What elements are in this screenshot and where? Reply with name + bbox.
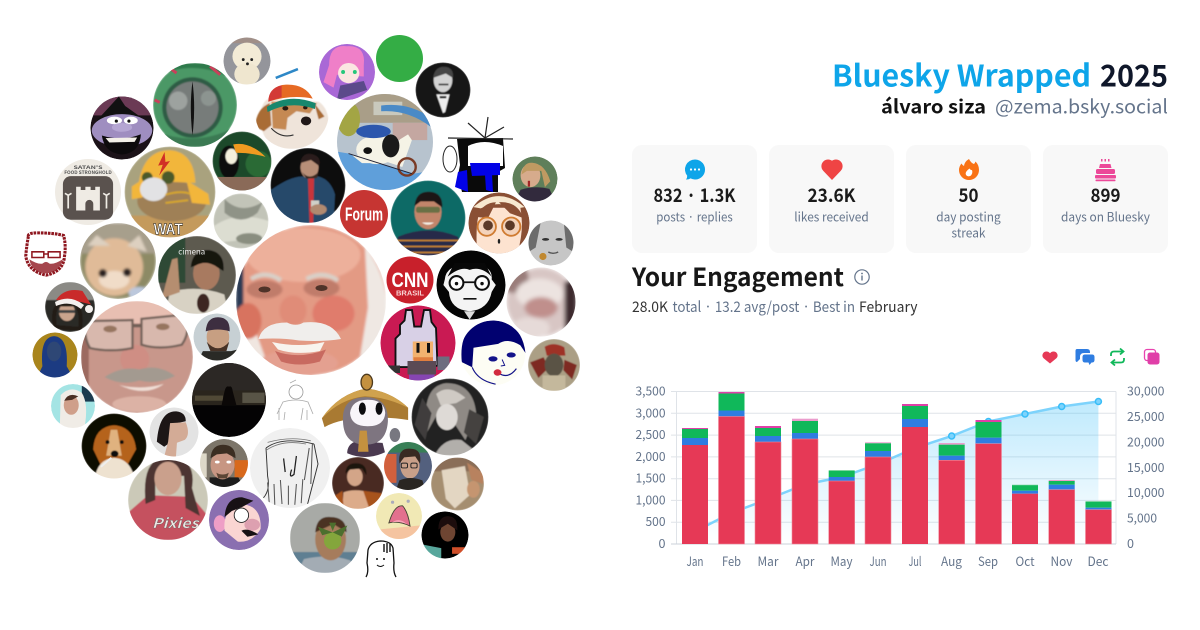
- left axis labels: 2,000: [636, 446, 666, 465]
- avatar: son of man apple: [290, 503, 360, 573]
- title: Bluesky Wrapped: [832, 52, 1091, 96]
- stat card: days on Bluesky: days on Bluesky: [1061, 206, 1150, 226]
- avatar: big pen sketch: [250, 428, 330, 508]
- month labels: Dec: [1088, 551, 1109, 570]
- month labels: Nov: [1050, 551, 1073, 570]
- avatar: ghost in golden hat: [321, 369, 409, 457]
- avatar: kitten: [80, 223, 156, 299]
- left axis labels: 1,500: [636, 468, 666, 487]
- avatar: frog WAT: [124, 146, 216, 238]
- avatar: woman in black and white: [412, 378, 488, 456]
- engagement summary: [632, 296, 918, 317]
- bar: Sep: [976, 420, 1002, 544]
- avatar cluster: [26, 35, 580, 577]
- bar: Aug: [939, 443, 965, 544]
- avatar: beanie man: [194, 314, 240, 360]
- left axis labels: 3,500: [636, 380, 666, 400]
- main avatar: smiling old man: [234, 225, 386, 376]
- avatar: girl with nosebleed: [512, 156, 558, 202]
- left axis labels: 1,000: [636, 489, 666, 508]
- month labels: Aug: [941, 551, 962, 570]
- bar: Dec: [1086, 501, 1112, 544]
- avatar: blue hooded figure: [32, 332, 78, 378]
- avatar: Forum logo: [340, 190, 388, 238]
- chart legend: [1042, 348, 1160, 366]
- stat card: posts and replies: posts · replies: [656, 206, 733, 226]
- avatar: night silhouette: [192, 363, 266, 437]
- month labels: May: [830, 551, 853, 570]
- avatar: CNN Brasil: [386, 256, 434, 304]
- icon: heart: [822, 160, 842, 178]
- avatar: Satan's food stronghold: FOOD STRONGHOLD: [64, 170, 112, 176]
- avatar: victorian man: [416, 62, 470, 118]
- avatar: black glasses cartoon: [436, 250, 506, 320]
- left axis labels: 2,500: [636, 424, 666, 443]
- stat card: day posting streak: streak: [952, 222, 986, 242]
- avatar: red bearded doodle: [26, 233, 65, 275]
- bar: Jun: [865, 442, 891, 544]
- stat card: days on Bluesky: 899: [1090, 182, 1120, 208]
- avatar: big glasses man: [81, 301, 193, 413]
- profile name and handle: [881, 92, 1168, 120]
- avatar: pale screaming creature: [376, 493, 422, 539]
- engagement summary: total · 13.2 avg/post · Best in: [672, 296, 855, 317]
- avatar: cimena man: [158, 236, 236, 314]
- avatar: blue mask doodle: [443, 117, 513, 192]
- month labels: Jun: [870, 551, 886, 570]
- left axis labels: 3,000: [636, 402, 666, 421]
- avatar: goth woman profile: [150, 408, 198, 456]
- heading: Your Engagement: Your Engagement: [631, 258, 844, 294]
- avatar: toucan: [212, 132, 272, 190]
- avatar: santa hat woman: [45, 282, 95, 332]
- avatar: Satan's food stronghold: SATAN'S: [73, 165, 103, 171]
- avatar: blurry animal: [506, 268, 576, 336]
- stat card: day posting streak: [906, 145, 1031, 253]
- avatar: dark young man: [422, 512, 468, 558]
- month labels: Sep: [978, 551, 998, 570]
- right axis labels: 15,000: [1127, 457, 1165, 476]
- profile name and handle: álvaro siza: [881, 92, 986, 120]
- stat card: day posting streak: 50: [958, 182, 979, 208]
- avatar: teal man: [390, 180, 466, 256]
- cumulative area and line: [695, 398, 1101, 544]
- avatar: pixies shirt woman: Pixies: [152, 512, 200, 532]
- stat card: likes received: [769, 145, 894, 253]
- stat card: day posting streak: day posting: [936, 206, 1001, 226]
- avatar: dog with propeller hat: [255, 69, 329, 149]
- avatar: pixies shirt woman: [128, 457, 208, 540]
- avatar: Forum logo: Forum: [345, 204, 383, 224]
- avatar: purple villain: [90, 96, 154, 160]
- avatar: plain green: [376, 35, 423, 82]
- avatar: pink anime: [319, 44, 375, 100]
- avatar: frog WAT: WAT: [154, 221, 183, 238]
- icon: legend quotes: [1144, 350, 1160, 364]
- avatar: man in jacket: [269, 148, 346, 223]
- bar: Nov: [1049, 480, 1075, 544]
- avatar: hoodie person: [51, 384, 95, 428]
- avatar: red painting: [528, 339, 580, 391]
- stacked bars: [682, 392, 1112, 544]
- right axis labels: 20,000: [1127, 431, 1165, 450]
- stat card: posts and replies: [632, 145, 757, 253]
- right axis labels: 5,000: [1127, 508, 1157, 527]
- avatar: line drawn head: [366, 541, 396, 577]
- bar: Oct: [1012, 485, 1038, 544]
- icon: info: [855, 270, 869, 284]
- icon: chat bubble: [685, 159, 705, 180]
- icon: cake: [1095, 159, 1116, 181]
- icon: flame: [959, 159, 979, 180]
- avatar: Satan's food stronghold: [55, 159, 121, 225]
- month labels: [686, 551, 1109, 570]
- avatar: anime girl with glasses: [468, 192, 530, 254]
- avatar: snoopy driving: [337, 94, 433, 190]
- title: 2025: [1100, 52, 1168, 96]
- combo chart: engagement by month: [636, 380, 1165, 570]
- left axis labels: 500: [646, 511, 666, 530]
- engagement summary: 28.0K: [632, 296, 669, 317]
- profile name and handle: @zema.bsky.social: [995, 92, 1168, 120]
- icon: legend replies: [1076, 349, 1094, 365]
- avatar: CNN Brasil: CNN: [392, 269, 428, 292]
- avatar: man with orange seat: [200, 439, 249, 487]
- avatar: CNN Brasil: BRASIL: [396, 290, 425, 298]
- bar: Jul: [902, 404, 928, 544]
- avatar: classical painting woman: [332, 457, 384, 509]
- engagement summary: February: [859, 296, 918, 317]
- stat card: likes received: 23.6K: [808, 182, 856, 208]
- avatar: engraving: [214, 194, 268, 248]
- bar: Mar: [755, 426, 781, 544]
- avatar: small line figure: [277, 380, 313, 420]
- month labels: Jan: [686, 551, 704, 570]
- stat card: posts and replies: 832 · 1.3K: [654, 182, 736, 208]
- bar: Feb: [718, 392, 744, 544]
- icon: legend reposts: [1111, 348, 1124, 366]
- right axis labels: 0: [1127, 533, 1134, 552]
- avatar: blue hair boy: [460, 320, 526, 386]
- month labels: Apr: [796, 551, 815, 570]
- left axis labels: 0: [658, 533, 666, 552]
- right axis labels: 25,000: [1127, 406, 1165, 425]
- bar: May: [829, 470, 855, 544]
- avatar: mask face: [431, 458, 484, 510]
- avatar: glasses guy colourful: [384, 442, 432, 490]
- avatar: cimena man: cimena: [178, 247, 205, 258]
- right axis labels: 30,000: [1127, 380, 1165, 400]
- bar: Jan: [682, 428, 708, 544]
- bar: Apr: [792, 419, 818, 544]
- avatar: collie: [82, 414, 146, 480]
- month labels: Feb: [722, 551, 741, 570]
- right axis labels: [1127, 380, 1165, 552]
- stat card: likes received: likes received: [794, 206, 869, 226]
- stat card: days on Bluesky: [1043, 145, 1168, 253]
- avatar: lizard eye: [153, 63, 237, 147]
- avatar: poodle: [224, 38, 270, 85]
- chart grid: [671, 392, 1116, 544]
- icon: legend heart: [1042, 351, 1058, 364]
- avatar: pixel character: [380, 306, 456, 380]
- month labels: Oct: [1016, 551, 1035, 570]
- right axis labels: 10,000: [1127, 482, 1165, 501]
- left axis labels: [636, 380, 666, 552]
- avatar: fornasetti face: [528, 220, 574, 266]
- month labels: Jul: [908, 551, 922, 570]
- avatar: purple cartoon: [209, 490, 269, 550]
- month labels: Mar: [758, 551, 779, 570]
